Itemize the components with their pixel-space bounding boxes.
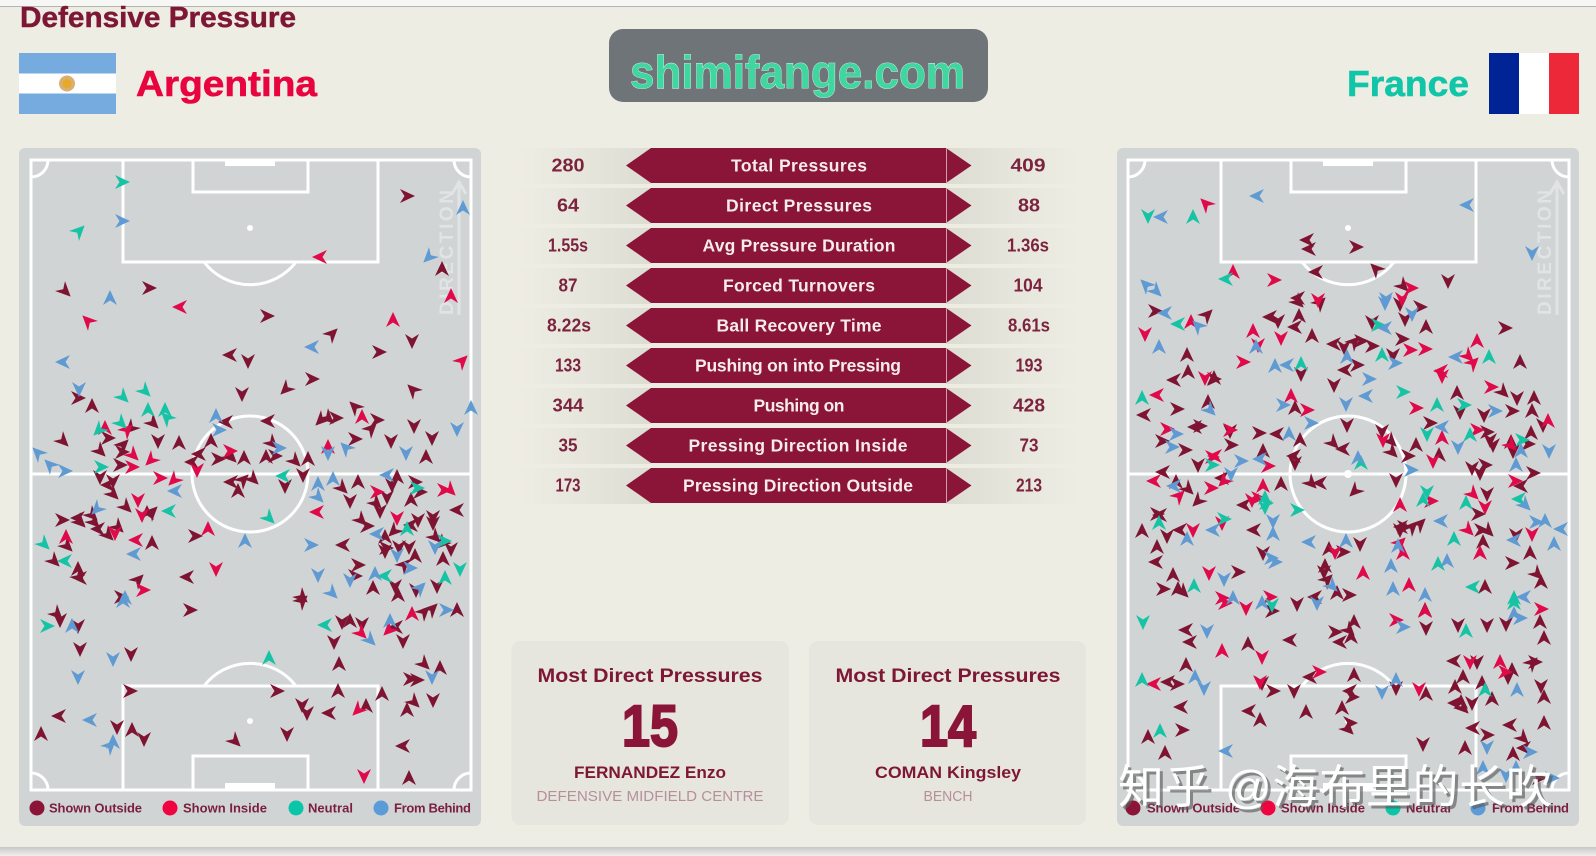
row: Ball Recovery Time: 8.22s bbox=[547, 314, 591, 336]
team header: France bbox=[1347, 53, 1579, 114]
markers: neutral bbox=[34, 175, 467, 665]
direction indicator bbox=[1535, 182, 1564, 315]
row: Direct Pressures: Direct Pressures bbox=[726, 196, 872, 216]
row: Avg Pressure Duration: 1.36s bbox=[1007, 234, 1049, 256]
row: Direct Pressures: 64 bbox=[557, 194, 580, 216]
legend: From Behind bbox=[394, 800, 471, 816]
row: Forced Turnovers: 104 bbox=[1014, 274, 1043, 296]
player position: DEFENSIVE MIDFIELD CENTRE bbox=[536, 788, 764, 805]
icon: France flag bbox=[1489, 53, 1579, 114]
big number: 14 bbox=[920, 694, 976, 759]
team name: France: France bbox=[1347, 63, 1469, 104]
legend: Shown Outside bbox=[1147, 800, 1240, 816]
pitch lines bbox=[1128, 160, 1569, 790]
row: Avg Pressure Duration bbox=[519, 228, 1078, 264]
watermark badge bbox=[609, 29, 988, 102]
row: Ball Recovery Time: Ball Recovery Time bbox=[716, 316, 882, 336]
markers: shown inside bbox=[1138, 193, 1555, 697]
row: Pressing Direction Inside bbox=[519, 428, 1078, 464]
panel: Argentina pressure map bbox=[19, 148, 481, 826]
comparison table bbox=[519, 148, 1078, 504]
legend bbox=[1126, 800, 1569, 816]
panel: France pressure map bbox=[1117, 148, 1579, 826]
card: Argentina top presser bbox=[512, 641, 789, 825]
row: Total Pressures: 280 bbox=[552, 154, 584, 176]
direction indicator bbox=[437, 182, 466, 315]
row: Pushing on: 344 bbox=[552, 394, 584, 416]
row: Pressing Direction Outside: Pressing Direction Outside bbox=[683, 476, 913, 496]
row: Total Pressures: Total Pressures bbox=[731, 156, 867, 176]
markers: from behind bbox=[27, 200, 478, 756]
legend: Neutral bbox=[1406, 800, 1451, 816]
player name: COMAN Kingsley bbox=[875, 763, 1022, 782]
row: Forced Turnovers: Forced Turnovers bbox=[723, 276, 875, 296]
player position: BENCH bbox=[924, 788, 972, 805]
watermark badge: shimifange.com bbox=[630, 46, 965, 98]
row: Pressing Direction Outside: 213 bbox=[1016, 474, 1042, 496]
row: Pushing on: Pushing on bbox=[754, 396, 844, 416]
title: Defensive Pressure bbox=[20, 2, 296, 34]
direction indicator: DIRECTION bbox=[1535, 190, 1556, 315]
row: Pressing Direction Inside: Pressing Direction Inside bbox=[688, 436, 908, 456]
markers: shown outside bbox=[34, 189, 464, 785]
team header: Argentina bbox=[19, 53, 318, 114]
legend: Neutral bbox=[308, 800, 353, 816]
icon: Argentina flag bbox=[19, 53, 116, 114]
direction indicator: DIRECTION bbox=[437, 190, 458, 315]
row: Pushing on into Pressing bbox=[519, 348, 1078, 384]
source watermark: 知乎 @海布里的长吹 bbox=[1118, 761, 1552, 813]
row: Avg Pressure Duration: 1.55s bbox=[548, 234, 588, 256]
pitch lines bbox=[31, 160, 471, 790]
legend: Shown Outside bbox=[49, 800, 142, 816]
row: Pushing on bbox=[519, 388, 1078, 424]
legend: Shown Inside bbox=[1281, 800, 1365, 816]
row: Pressing Direction Outside bbox=[519, 468, 1078, 504]
markers: shown inside bbox=[59, 250, 473, 784]
row: Pushing on into Pressing: Pushing on into Pressing bbox=[695, 356, 901, 376]
row: Pressing Direction Inside: 73 bbox=[1020, 434, 1038, 456]
row: Total Pressures: 409 bbox=[1010, 154, 1046, 176]
markers: from behind bbox=[1135, 189, 1568, 785]
row: Pressing Direction Outside: 173 bbox=[556, 474, 580, 496]
row: Pushing on: 428 bbox=[1013, 394, 1045, 416]
row: Ball Recovery Time bbox=[519, 308, 1078, 344]
row: Pushing on into Pressing: 133 bbox=[555, 354, 581, 376]
row: Pushing on into Pressing: 193 bbox=[1016, 354, 1042, 376]
card title: Most Direct Pressures bbox=[538, 665, 763, 687]
row: Forced Turnovers bbox=[519, 268, 1078, 304]
row: Pressing Direction Inside: 35 bbox=[558, 434, 578, 456]
row: Avg Pressure Duration: Avg Pressure Duration bbox=[702, 236, 896, 256]
row: Total Pressures bbox=[519, 148, 1078, 184]
row: Direct Pressures bbox=[519, 188, 1078, 224]
legend: From Behind bbox=[1492, 800, 1569, 816]
player name: FERNANDEZ Enzo bbox=[574, 763, 726, 782]
team name: Argentina: Argentina bbox=[136, 63, 318, 104]
row: Ball Recovery Time: 8.61s bbox=[1008, 314, 1050, 336]
card: France top presser bbox=[809, 641, 1086, 825]
card title: Most Direct Pressures bbox=[836, 665, 1061, 687]
markers: shown outside bbox=[1135, 233, 1551, 785]
row: Forced Turnovers: 87 bbox=[558, 274, 578, 296]
legend: Shown Inside bbox=[183, 800, 267, 816]
markers: neutral bbox=[1135, 209, 1530, 738]
row: Direct Pressures: 88 bbox=[1018, 194, 1040, 216]
big number: 15 bbox=[622, 694, 678, 759]
legend bbox=[30, 800, 471, 816]
